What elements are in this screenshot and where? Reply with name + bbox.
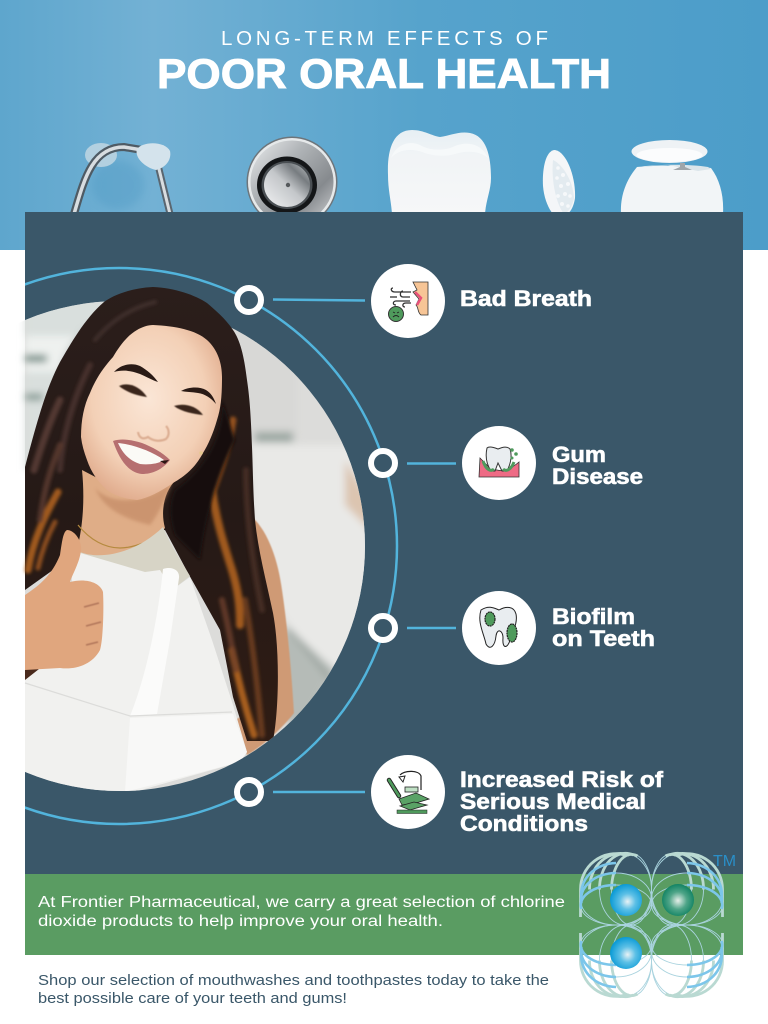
connector bbox=[407, 627, 456, 629]
label: Serious Medical bbox=[460, 789, 646, 814]
neck shadow bbox=[95, 482, 172, 525]
bib fold bbox=[130, 568, 179, 716]
bib bbox=[25, 550, 247, 796]
label: Conditions bbox=[460, 811, 588, 836]
closing text bbox=[38, 973, 549, 1007]
connector bbox=[273, 791, 365, 793]
label bbox=[460, 767, 664, 836]
label: on Teeth bbox=[552, 626, 655, 651]
item: biofilm on teeth bbox=[371, 591, 655, 665]
hair streaks bbox=[28, 302, 262, 735]
logo ball: blue bottom bbox=[610, 937, 642, 969]
label: Disease bbox=[552, 464, 643, 489]
logo ball: blue top bbox=[610, 884, 642, 916]
closing text: Shop our selection of mouthwashes and toothpastes today to take the bbox=[38, 973, 549, 989]
bib lower shade bbox=[126, 748, 247, 791]
item: increased risk bbox=[237, 755, 664, 836]
ring node bbox=[237, 780, 261, 804]
thumbs-up hand bbox=[25, 530, 103, 670]
icon: dental chair bbox=[371, 755, 445, 829]
eyebrows bbox=[114, 364, 216, 404]
logo rings bbox=[580, 853, 723, 997]
label: Bad Breath bbox=[460, 286, 592, 311]
header dental objects bbox=[70, 130, 724, 212]
photo background bbox=[25, 295, 370, 795]
ring node bbox=[237, 288, 261, 312]
label: Biofilm bbox=[552, 604, 635, 629]
trademark: TM bbox=[713, 853, 736, 870]
main title: POOR ORAL HEALTH bbox=[157, 50, 611, 97]
item: gum disease bbox=[371, 426, 643, 500]
ring node bbox=[371, 616, 395, 640]
top garment bbox=[80, 527, 190, 590]
mouth corner bbox=[160, 460, 169, 464]
right arm bbox=[235, 515, 294, 755]
stethoscope chest piece bbox=[246, 136, 338, 212]
eyes bbox=[119, 384, 203, 415]
connector bbox=[407, 462, 456, 465]
label: Increased Risk of bbox=[460, 767, 664, 792]
green banner bbox=[25, 874, 743, 955]
face bbox=[81, 325, 222, 500]
icon: gum disease bbox=[462, 426, 536, 500]
item: bad breath bbox=[237, 264, 592, 338]
teeth bbox=[118, 443, 164, 464]
lips bbox=[113, 440, 170, 474]
label: Gum bbox=[552, 442, 606, 467]
hair bbox=[25, 287, 278, 741]
logo: Frontier Pharmaceutical bbox=[580, 853, 736, 997]
logo ball: green bbox=[662, 884, 694, 916]
arc ring bbox=[0, 268, 397, 824]
tooth model bbox=[388, 130, 491, 214]
icon: bad breath bbox=[371, 264, 445, 338]
dark panel bbox=[25, 212, 743, 874]
dark hair shadow near neck bbox=[170, 400, 235, 560]
connector bbox=[273, 300, 365, 301]
nose bbox=[138, 426, 169, 441]
label bbox=[552, 442, 643, 489]
banner text: dioxide products to help improve your oral health. bbox=[38, 913, 443, 930]
header title bbox=[157, 27, 611, 97]
earring bbox=[199, 451, 203, 455]
ring node bbox=[371, 451, 395, 475]
title eyebrow: LONG-TERM EFFECTS OF bbox=[221, 27, 548, 50]
necklace bbox=[78, 525, 150, 548]
header background bbox=[0, 0, 768, 250]
closing text: best possible care of your teeth and gums! bbox=[38, 991, 347, 1007]
lower hair tip bbox=[25, 669, 39, 680]
toothbrush bbox=[543, 150, 575, 214]
finger lines bbox=[84, 603, 101, 645]
banner text bbox=[38, 894, 565, 930]
dental floss bbox=[621, 140, 723, 214]
icon: biofilm tooth bbox=[462, 591, 536, 665]
photo: smiling patient bbox=[25, 287, 370, 796]
stethoscope bbox=[74, 143, 170, 214]
banner text: At Frontier Pharmaceutical, we carry a great selection of chlorine bbox=[38, 894, 565, 911]
bib seam bbox=[25, 683, 232, 716]
neck and chest bbox=[76, 470, 176, 557]
label bbox=[552, 604, 655, 651]
